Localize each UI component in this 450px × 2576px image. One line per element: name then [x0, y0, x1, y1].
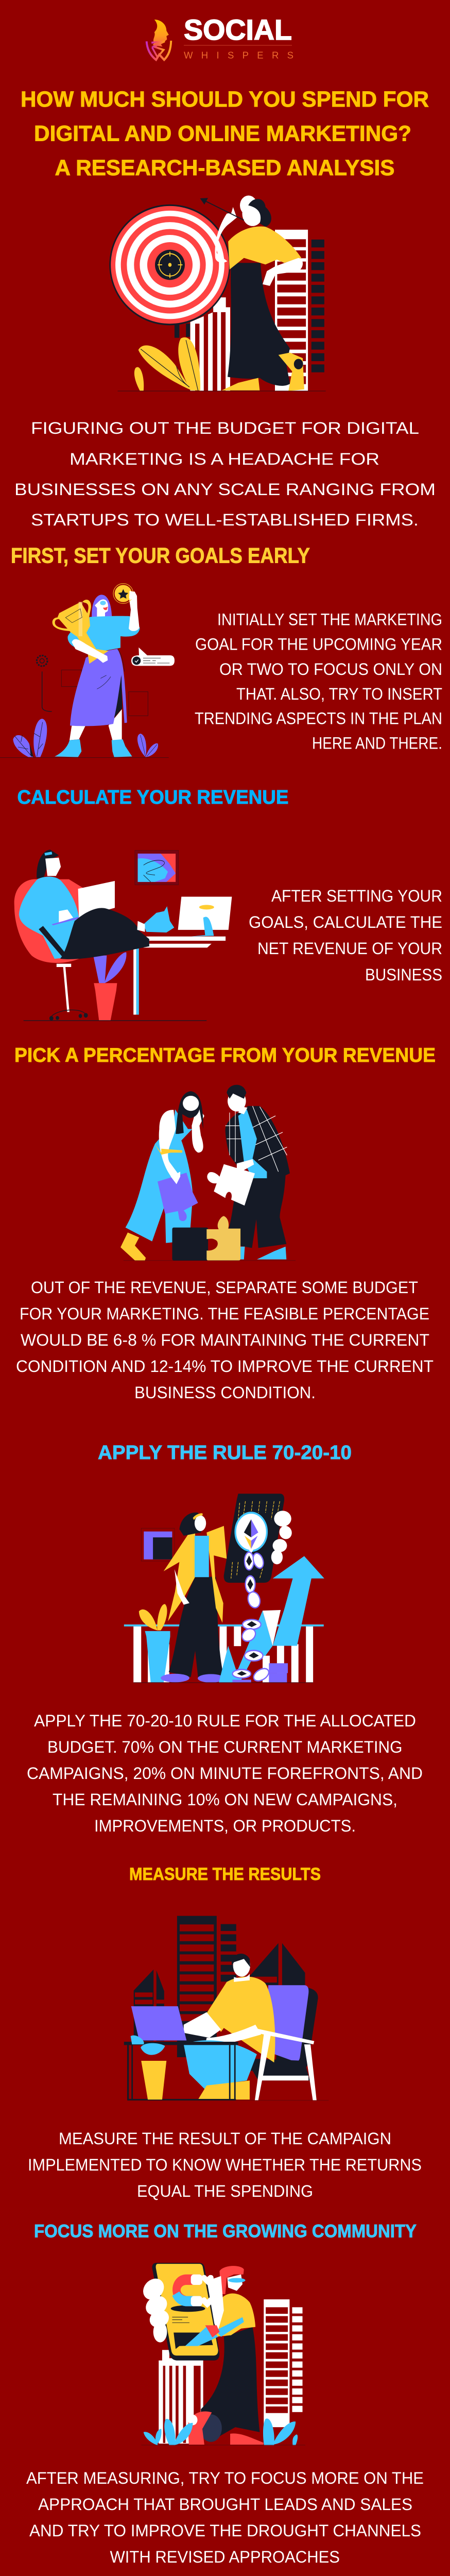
title: A RESEARCH-BASED ANALYSIS	[55, 156, 394, 180]
body text: BUSINESS CONDITION.	[134, 1383, 316, 1402]
body text	[195, 610, 442, 752]
body text: GOALS, CALCULATE THE	[249, 913, 442, 931]
body text: OUT OF THE REVENUE, SEPARATE SOME BUDGET	[31, 1278, 418, 1297]
dark city buildings	[134, 1916, 305, 2057]
body text: OR TWO TO FOCUS ONLY ON	[219, 660, 442, 679]
chair	[14, 879, 88, 1021]
target	[109, 205, 231, 338]
man figure	[226, 1085, 290, 1260]
body text: IMPROVEMENTS, OR PRODUCTS.	[94, 1817, 356, 1835]
body text: WOULD BE 6-8 % FOR MAINTAINING THE CURRENT	[21, 1331, 429, 1349]
woman figure	[161, 1513, 227, 1683]
body text: MEASURE THE RESULT OF THE CAMPAIGN	[59, 2129, 391, 2148]
body text: AFTER MEASURING, TRY TO FOCUS MORE ON THE	[26, 2469, 424, 2487]
coin stack	[232, 1663, 288, 1683]
heading: MEASURE THE RESULTS	[129, 1865, 321, 1884]
woman figure	[120, 1091, 204, 1260]
body text: AFTER SETTING YOUR	[271, 887, 442, 905]
chat bubble	[131, 648, 175, 666]
intro text: FIGURING OUT THE BUDGET FOR DIGITAL	[31, 419, 419, 437]
hand	[140, 2275, 170, 2343]
background line icons	[37, 655, 148, 716]
laptop	[131, 2006, 186, 2040]
desk	[133, 937, 226, 1014]
buildings	[159, 2299, 302, 2444]
panel: measure the results	[28, 1865, 422, 2200]
body text: WITH REVISED APPROACHES	[110, 2548, 340, 2566]
body text	[28, 2129, 422, 2200]
body text: APPLY THE 70-20-10 RULE FOR THE ALLOCATED	[34, 1711, 416, 1730]
picture frame	[141, 1528, 175, 1561]
illustration: woman with trophy	[0, 584, 175, 758]
monitor	[178, 896, 232, 937]
heading: FIRST, SET YOUR GOALS EARLY	[11, 543, 310, 568]
woman	[201, 195, 304, 391]
body text: APPROACH THAT BROUGHT LEADS AND SALES	[38, 2495, 412, 2514]
body text: AND TRY TO IMPROVE THE DROUGHT CHANNELS	[29, 2521, 421, 2540]
woman figure	[53, 584, 140, 757]
illustration: woman at desk	[14, 850, 232, 1021]
plants	[13, 719, 158, 757]
plant	[93, 952, 127, 1021]
building left	[191, 297, 230, 391]
shoes	[188, 2412, 264, 2445]
logo subline: WHISPERS	[184, 49, 293, 61]
title	[21, 87, 429, 180]
panel: set your goals	[0, 543, 442, 758]
desk	[124, 2042, 238, 2100]
body text	[249, 887, 442, 984]
body text: EQUAL THE SPENDING	[137, 2182, 313, 2200]
intro text: BUSINESSES ON ANY SCALE RANGING FROM	[14, 480, 436, 499]
body text: CONDITION AND 12-14% TO IMPROVE THE CURRENT	[16, 1357, 434, 1376]
panel: calculate revenue	[14, 787, 442, 1021]
header logo	[147, 13, 293, 61]
woman figure	[200, 2266, 259, 2442]
chair	[191, 1985, 318, 2080]
heading: APPLY THE RULE 70-20-10	[98, 1442, 352, 1464]
illustration: man on laptop	[124, 1916, 328, 2100]
intro text: MARKETING IS A HEADACHE FOR	[70, 450, 379, 468]
illustration: couple with puzzle	[120, 1085, 296, 1261]
leaves	[134, 337, 200, 391]
body text: NET REVENUE OF YOUR	[257, 939, 442, 958]
building right	[275, 230, 324, 391]
man figure	[184, 1954, 275, 2099]
body text	[16, 1278, 434, 1402]
growth arrow	[219, 1556, 324, 1683]
chair frame	[255, 2028, 317, 2100]
logo wordmark: SOCIAL	[184, 13, 292, 46]
panel: apply the rule	[27, 1442, 423, 1835]
phone	[152, 2263, 219, 2361]
panel: growing community	[26, 2222, 424, 2566]
icon: logo mark	[147, 20, 171, 60]
plant	[139, 1604, 170, 1683]
body text: THE REMAINING 10% ON NEW CAMPAIGNS,	[53, 1790, 397, 1809]
coins	[232, 1551, 270, 1683]
shelf and stripes	[124, 1624, 324, 1683]
heading: FOCUS MORE ON THE GROWING COMMUNITY	[34, 2222, 417, 2241]
picture	[135, 851, 179, 885]
phone	[224, 1494, 293, 1583]
body text: BUDGET. 70% ON THE CURRENT MARKETING	[47, 1738, 403, 1756]
body text: BUSINESS	[365, 965, 442, 984]
illustration: woman with target	[109, 195, 326, 392]
panel: pick a percentage	[14, 1044, 436, 1402]
intro text: STARTUPS TO WELL-ESTABLISHED FIRMS.	[31, 511, 419, 529]
intro text	[14, 419, 436, 529]
title: HOW MUCH SHOULD YOU SPEND FOR	[21, 87, 429, 112]
plant	[131, 2036, 166, 2099]
body text	[27, 1711, 423, 1835]
body text	[26, 2469, 424, 2566]
woman figure	[19, 850, 174, 959]
illustration: woman with phone and growth arrow	[124, 1494, 324, 1683]
body text: IMPLEMENTED TO KNOW WHETHER THE RETURNS	[28, 2156, 422, 2174]
puzzle pieces	[158, 1159, 255, 1260]
heading: CALCULATE YOUR REVENUE	[18, 787, 288, 808]
illustration: woman with phone magnet	[140, 2263, 305, 2445]
title: DIGITAL AND ONLINE MARKETING?	[34, 122, 411, 146]
body text: CAMPAIGNS, 20% ON MINUTE FOREFRONTS, AND	[27, 1764, 423, 1783]
body text: FOR YOUR MARKETING. THE FEASIBLE PERCENTAGE	[20, 1304, 429, 1323]
heading: PICK A PERCENTAGE FROM YOUR REVENUE	[14, 1044, 436, 1066]
plants	[144, 2418, 298, 2445]
